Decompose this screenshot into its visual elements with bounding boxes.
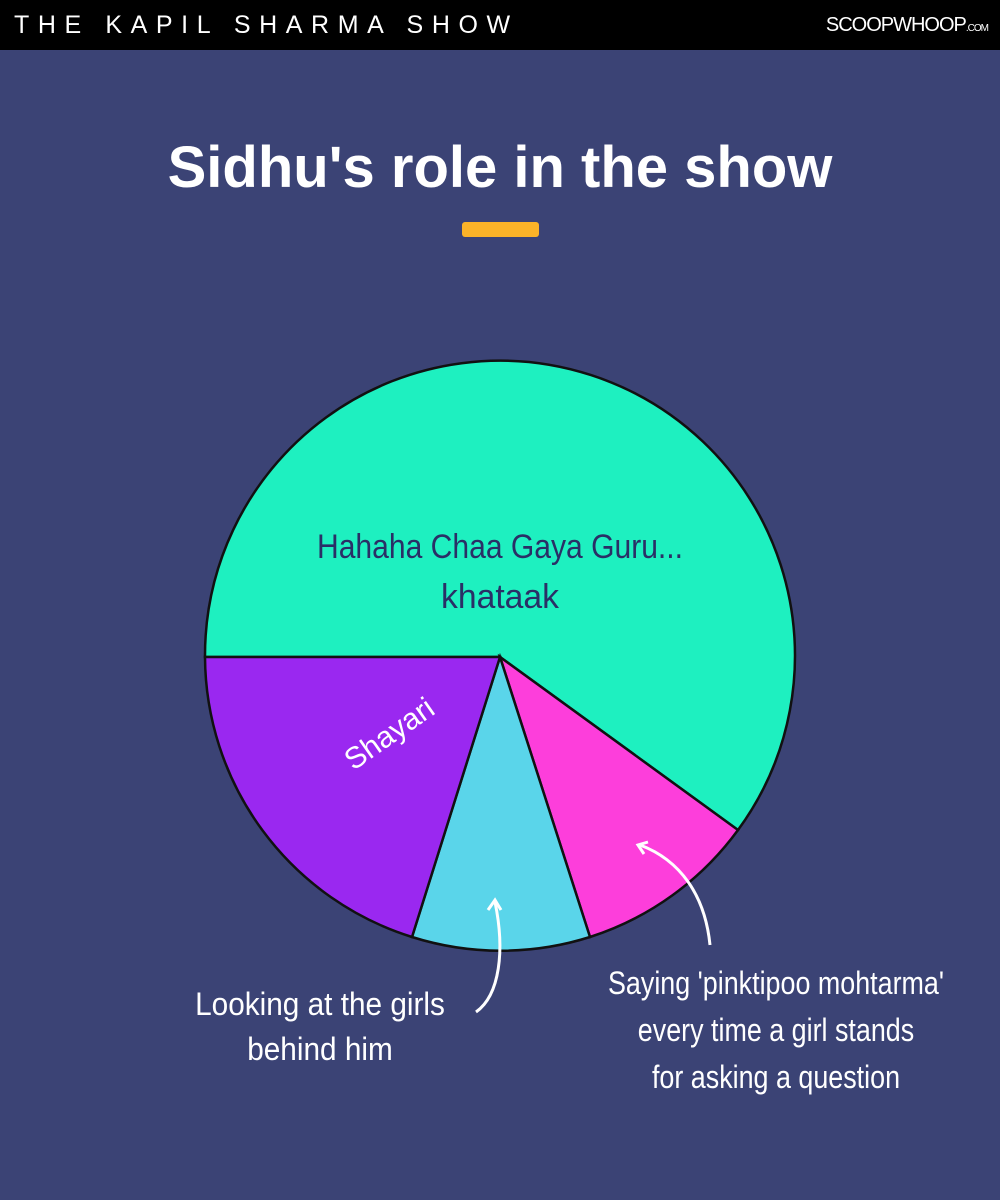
label: khataak: khataak xyxy=(441,578,560,616)
label: khataak xyxy=(317,528,683,616)
slice: looking at girls xyxy=(412,657,590,951)
header bar xyxy=(0,0,1000,50)
arrow: pinktipoo xyxy=(638,842,710,945)
label: looking at girls: Looking at the girls xyxy=(195,986,445,1022)
slice: shayari xyxy=(205,657,500,937)
accent bar xyxy=(462,222,539,237)
slice: pinktipoo xyxy=(500,657,738,937)
label: pinktipoo xyxy=(608,965,944,1095)
header bar: THE KAPIL SHARMA SHOW xyxy=(14,11,519,39)
label: pinktipoo: for asking a question xyxy=(652,1059,900,1095)
label: looking at girls xyxy=(195,986,445,1067)
slice: khataak xyxy=(205,361,795,830)
title: Sidhu's role in the show xyxy=(168,135,832,200)
header bar: SCOOPWHOOP.COM xyxy=(826,14,988,36)
label: pinktipoo: every time a girl stands xyxy=(638,1012,914,1048)
label: khataak: Hahaha Chaa Gaya Guru... xyxy=(317,528,683,566)
label: shayari: Shayari xyxy=(338,692,441,777)
arrow: looking xyxy=(476,900,501,1012)
label: pinktipoo: Saying 'pinktipoo mohtarma' xyxy=(608,965,944,1001)
label: looking at girls: behind him xyxy=(247,1031,393,1067)
